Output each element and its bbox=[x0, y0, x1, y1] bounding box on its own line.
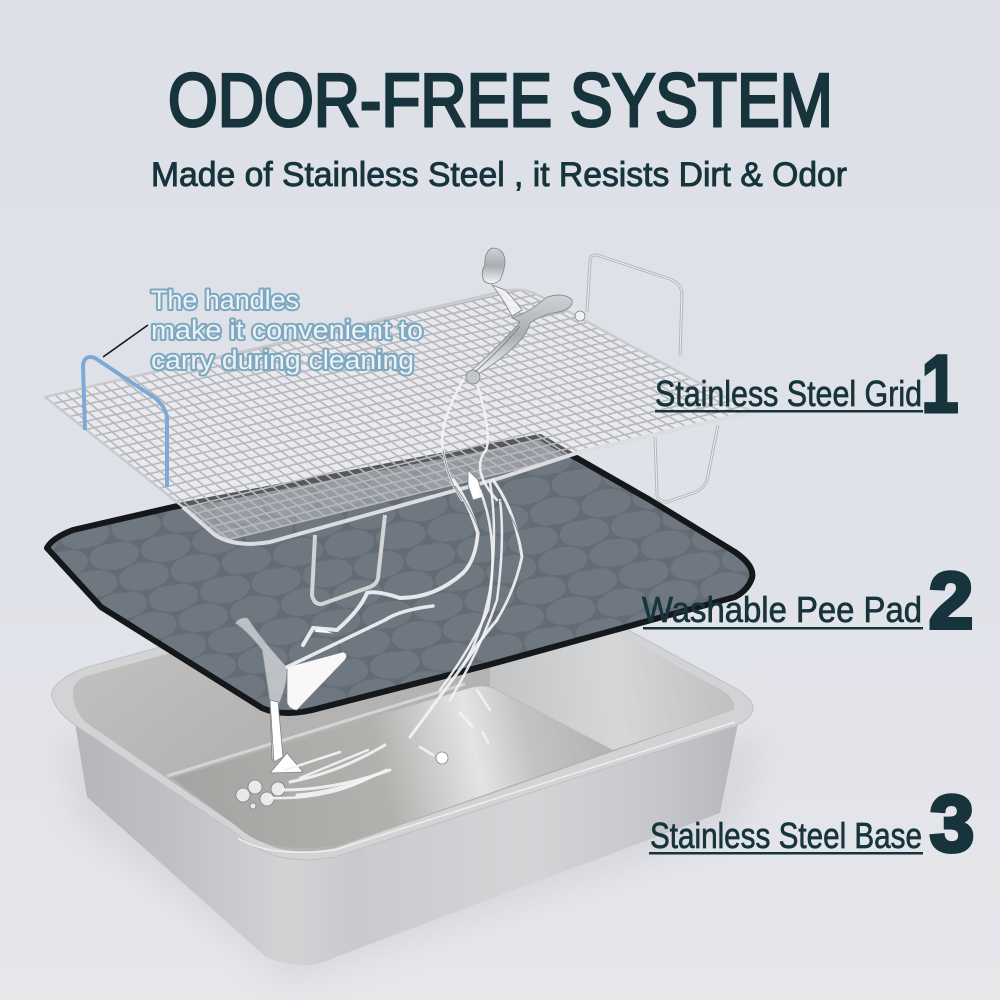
stainless steel base tray bbox=[52, 555, 770, 985]
label 2: washable pee pad bbox=[642, 556, 973, 645]
stainless steel grid bbox=[45, 288, 752, 544]
callout text: The handles bbox=[151, 285, 299, 315]
callout text: carry during cleaning bbox=[151, 345, 414, 375]
label 3: stainless steel base bbox=[649, 779, 974, 868]
label 1: stainless steel grid: 1 bbox=[921, 338, 959, 429]
label 2: washable pee pad: Washable Pee Pad bbox=[642, 589, 922, 630]
callout leader line bbox=[103, 325, 148, 357]
callout text: make it convenient to bbox=[151, 315, 423, 345]
washable pee pad bbox=[47, 437, 752, 713]
label 1: stainless steel grid bbox=[655, 338, 959, 429]
rear and right grid handles bbox=[587, 255, 718, 502]
label 3: stainless steel base: Stainless Steel Base bbox=[650, 815, 922, 856]
label 3: stainless steel base: 3 bbox=[930, 779, 974, 868]
label 1: stainless steel grid: Stainless Steel Grid bbox=[655, 373, 922, 414]
highlighted blue handle bbox=[83, 357, 167, 487]
label 2: washable pee pad: 2 bbox=[929, 556, 973, 645]
water splash bbox=[235, 248, 585, 809]
front grid leg bbox=[312, 515, 385, 604]
title: ODOR-FREE SYSTEM bbox=[168, 58, 833, 142]
callout: handles note bbox=[103, 285, 423, 375]
callout text bbox=[151, 285, 423, 375]
subtitle: Made of Stainless Steel , it Resists Dirt & Odor bbox=[151, 156, 847, 194]
